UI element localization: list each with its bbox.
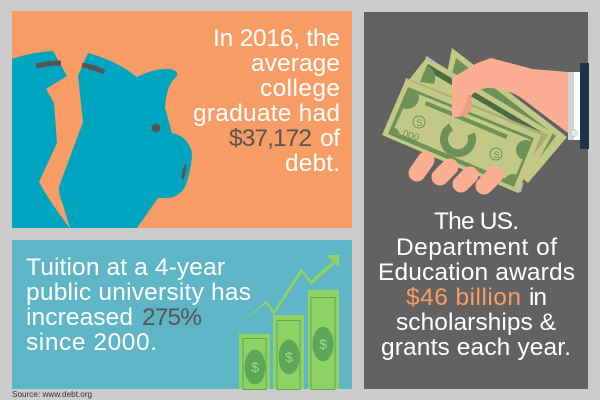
heading: debt statistic: of [320,125,340,152]
heading: debt statistic: graduate had [193,100,340,127]
chart: rising money stacks: $ [251,359,259,375]
panel: average graduate debt [12,11,352,228]
icon: broken piggy bank [12,51,192,228]
text: scholarships statistic: Department of [396,234,557,261]
panel: tuition increase [12,240,352,390]
chart: rising money stacks: $ [285,349,293,365]
heading: debt statistic [193,25,340,177]
heading: debt statistic: average [251,50,340,77]
text: tuition statistic: increased [26,304,133,331]
heading: debt statistic: debt. [285,150,340,177]
icon: hand holding cash: S [494,150,500,160]
icon: hand holding cash: S [416,118,423,128]
text: scholarships statistic: Education awards [378,259,575,286]
text: scholarships statistic: in [529,284,547,311]
icon: hand holding cash: 000 [401,128,421,144]
chart: rising money stacks: $ [319,336,327,352]
text: scholarships statistic: The US. [434,208,519,235]
text: tuition statistic: 275% [142,304,202,331]
text: tuition statistic: public university has [26,279,251,306]
icon: hand holding cash [382,48,589,193]
heading: debt statistic: college [260,75,340,102]
panel: Department of Education awards [364,12,589,389]
text: scholarships statistic: $46 billion [406,284,521,311]
heading: debt statistic: $37,172 [229,125,312,152]
heading: debt statistic: In 2016, the [213,25,340,52]
text: scholarships statistic: grants each year. [381,334,571,361]
text: tuition statistic [26,254,251,356]
text: scholarships statistic: scholarships & [396,309,556,336]
source note: Source: www.debt.org [12,390,93,399]
text: tuition statistic: since 2000. [26,329,157,356]
text: tuition statistic: Tuition at a 4-year [26,254,225,281]
chart: rising money stacks [239,255,339,390]
text: scholarships statistic [378,208,575,361]
